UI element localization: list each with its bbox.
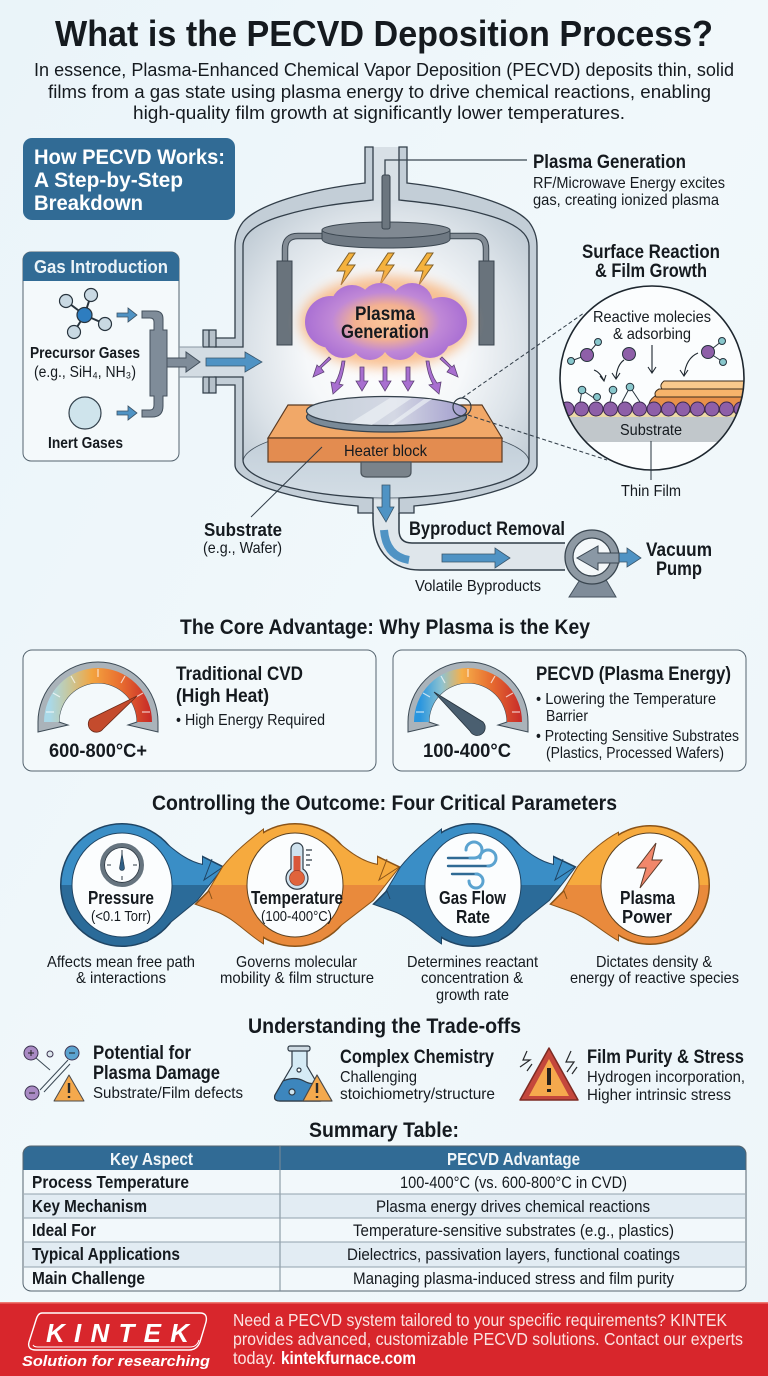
label: vacuum pump: Pump [656, 559, 702, 580]
row: ideal for: Ideal For [32, 1220, 96, 1240]
chamber interior [180, 147, 565, 570]
trade-off: film purity and stress: Film Purity & Stress [587, 1047, 744, 1068]
magnified view: surface reaction: Reactive molecies [593, 309, 711, 326]
icon: ions and warning [24, 1046, 84, 1101]
row: typical applications: Dielectrics, passivation layers, functional coatings [347, 1246, 680, 1264]
row: process temperature [32, 1172, 627, 1192]
description: gas flow rate: growth rate [436, 987, 509, 1004]
label: precursor gases: (e.g., SiH₄, NH₃) [34, 364, 136, 381]
callout: substrate: Substrate [204, 520, 282, 540]
gas-phase molecules [568, 338, 726, 366]
label: gas flow rate: Rate [456, 907, 490, 927]
label: pressure [88, 888, 154, 925]
heading: critical parameters: Controlling the Outcome: Four Critical Parameters [152, 791, 617, 815]
icon: thermometer [286, 843, 312, 889]
row: main challenge [32, 1268, 675, 1288]
label: vacuum pump: Vacuum [646, 540, 712, 561]
intro paragraph: films from a gas state using plasma energy to drive chemical reactions, enabling [48, 81, 711, 102]
node: gas flow rate [374, 824, 575, 946]
description: plasma power [570, 954, 739, 987]
icon: precursor molecule [60, 288, 112, 338]
trade-off: plasma damage: Substrate/Film defects [93, 1085, 243, 1102]
panel: PECVD plasma energy: PECVD (Plasma Energy) [536, 663, 731, 685]
heading: core advantage: The Core Advantage: Why Plasma is the Key [180, 615, 590, 639]
label: volatile byproducts: Volatile Byproducts [415, 578, 541, 595]
section banner: how PECVD works: Breakdown [34, 191, 143, 215]
icon: pressure gauge [102, 845, 142, 885]
label: precursor gases: Precursor Gases [30, 345, 140, 362]
arrow: exhaust down [377, 485, 394, 522]
description: pressure: & interactions [76, 970, 166, 987]
plasma cloud: Plasma [355, 304, 415, 325]
heading: surface reaction: Surface Reaction [582, 241, 720, 263]
gauge: high temperature [38, 662, 158, 732]
panel: traditional CVD: • High Energy Required [176, 712, 325, 729]
arrow: byproduct flow [442, 548, 510, 568]
heading: trade-offs: Understanding the Trade-offs [248, 1014, 521, 1038]
row: key mechanism: Key Mechanism [32, 1196, 147, 1216]
icon: flask and warning [275, 1046, 332, 1101]
adsorbed molecules [578, 383, 640, 402]
label: pressure: (<0.1 Torr) [91, 908, 151, 925]
label: gas flow rate [439, 888, 507, 927]
trade-off: plasma damage: Plasma Damage [93, 1063, 220, 1084]
intro paragraph: high-quality film growth at significantly lower temperatures. [133, 102, 625, 123]
icon: lightning bolts [337, 253, 433, 285]
description: plasma power: energy of reactive species [570, 970, 739, 987]
trade-off: complex chemistry: Complex Chemistry [340, 1047, 494, 1068]
panel: traditional CVD: 600-800°C+ [49, 740, 147, 762]
label: plasma power [620, 888, 676, 927]
table header: PECVD Advantage [447, 1149, 580, 1169]
panel: traditional CVD [23, 650, 376, 771]
gauge: low temperature [408, 662, 528, 736]
call to action: kintekfurnace.com [281, 1348, 416, 1368]
inlet flange [203, 330, 216, 393]
intro paragraph: In essence, Plasma-Enhanced Chemical Vapor Deposition (PECVD) deposits thin, solid [34, 59, 734, 80]
row: main challenge: Main Challenge [32, 1268, 145, 1288]
arrow: gas inlet flow [206, 352, 262, 372]
panel: gas introduction: Gas Introduction [34, 256, 168, 277]
label: temperature: (100-400°C) [261, 908, 332, 925]
heater block: Heater block [344, 443, 428, 460]
adsorption arrows [594, 345, 698, 381]
row: process temperature: Process Temperature [32, 1172, 189, 1192]
magnified view: surface reaction: Thin Film [621, 483, 681, 500]
label: pressure: Pressure [88, 888, 154, 908]
top electrode [277, 175, 494, 345]
trade-off: plasma damage: Potential for [93, 1043, 192, 1064]
node: temperature [196, 824, 399, 946]
panel: PECVD plasma energy: 100-400°C [423, 740, 511, 762]
trade-off: plasma damage [24, 1043, 243, 1102]
node: pressure [61, 824, 223, 946]
panel: PECVD plasma energy: Barrier [546, 708, 589, 725]
description: gas flow rate: concentration & [421, 970, 523, 987]
row: key mechanism: Plasma energy drives chemical reactions [376, 1198, 650, 1216]
table header: Key Aspect [110, 1149, 193, 1169]
description: temperature: mobility & film structure [220, 970, 374, 987]
row: process temperature: 100-400°C (vs. 600-800°C in CVD) [400, 1174, 627, 1192]
magnified view: surface reaction: & adsorbing [613, 326, 691, 343]
call to action: Need a PECVD system tailored to your specific requirements? KINTEK [233, 1310, 727, 1330]
description: pressure: Affects mean free path [47, 954, 195, 971]
diagram: PECVD chamber [142, 147, 641, 597]
row: ideal for: Temperature-sensitive substrates (e.g., plastics) [353, 1222, 674, 1240]
panel: PECVD plasma energy: • Protecting Sensitive Substrates [536, 728, 739, 745]
exhaust pipe [373, 513, 565, 570]
heading: surface reaction: & Film Growth [595, 260, 707, 282]
trade-off: complex chemistry [275, 1046, 495, 1103]
label: gas flow rate: Gas Flow [439, 888, 507, 908]
panel: traditional CVD: (High Heat) [176, 685, 269, 707]
surface atoms [560, 402, 748, 416]
callout: substrate: (e.g., Wafer) [203, 540, 282, 557]
arrows: plasma species flow [313, 357, 458, 394]
callout: plasma generation: RF/Microwave Energy excites [533, 175, 725, 192]
panel: PECVD plasma energy [393, 650, 746, 771]
row: main challenge: Managing plasma-induced stress and film purity [353, 1270, 675, 1288]
wafer [306, 396, 466, 432]
heading: summary table: Summary Table: [309, 1119, 459, 1142]
table header [110, 1149, 580, 1169]
icon: warning triangle [520, 1048, 578, 1100]
trade-off: film purity and stress: Hydrogen incorporation, [587, 1069, 745, 1086]
manifold [142, 311, 200, 417]
plasma cloud [300, 276, 472, 368]
node: plasma power [551, 826, 709, 944]
magnified view: surface reaction: Substrate [620, 422, 682, 439]
panel: PECVD plasma energy: • Lowering the Temperature [536, 691, 716, 708]
magnified view: surface reaction [453, 286, 760, 500]
heading: surface reaction [582, 241, 720, 282]
flow diagram: four parameters [61, 824, 709, 946]
description: gas flow rate [407, 954, 539, 1004]
section banner: how PECVD works [23, 138, 235, 220]
chamber wall: left lower [215, 377, 373, 513]
callout: plasma generation [385, 151, 725, 209]
row: ideal for [32, 1220, 674, 1240]
label: byproduct removal: Byproduct Removal [409, 519, 565, 540]
callout: substrate [203, 447, 322, 557]
label: plasma power: Plasma [620, 888, 676, 908]
description: gas flow rate: Determines reactant [407, 954, 539, 971]
chamber wall: right [399, 147, 537, 513]
label: inert gases: Inert Gases [48, 435, 123, 452]
title: What is the PECVD Deposition Process? [55, 13, 713, 54]
label: plasma power: Power [622, 907, 672, 927]
arrows into manifold [117, 308, 137, 420]
heater block [268, 405, 502, 477]
icon: inert gas sphere [69, 397, 101, 429]
trade-off: complex chemistry: stoichiometry/structure [340, 1086, 495, 1103]
logo: KINTEK [22, 1313, 210, 1370]
trade-off: film purity and stress: Higher intrinsic stress [587, 1087, 731, 1104]
panel: gas introduction [23, 252, 179, 461]
summary table [23, 1146, 746, 1291]
footer banner [0, 1302, 768, 1376]
label: temperature [251, 888, 343, 925]
row: typical applications [32, 1244, 680, 1264]
plasma cloud: Generation [341, 322, 429, 343]
description: temperature: Governs molecular [236, 954, 358, 971]
film layers [649, 381, 750, 412]
call to action [233, 1310, 743, 1368]
section banner: how PECVD works: How PECVD Works: [34, 145, 225, 169]
intro paragraph [34, 59, 734, 123]
chamber wall: left upper [215, 147, 373, 347]
section banner: how PECVD works: A Step-by-Step [34, 168, 183, 192]
description: pressure [47, 954, 195, 987]
arrow: exhaust bend [384, 530, 409, 560]
row: key mechanism [32, 1196, 650, 1216]
label: precursor gases [30, 345, 140, 381]
description: temperature [220, 954, 374, 987]
panel: traditional CVD: Traditional CVD [176, 663, 303, 685]
vacuum pump [565, 530, 641, 597]
row: typical applications: Typical Applications [32, 1244, 180, 1264]
label: vacuum pump [646, 540, 712, 580]
icon: gas flow wind [448, 842, 496, 888]
trade-off: complex chemistry: Challenging [340, 1069, 417, 1086]
callout: plasma generation: Plasma Generation [533, 151, 686, 173]
logo: KINTEK: Solution for researching [22, 1354, 210, 1370]
logo: KINTEK: KINTEK [46, 1318, 191, 1348]
trade-off: film purity and stress [520, 1047, 745, 1104]
call to action: today. [233, 1348, 276, 1368]
label: temperature: Temperature [251, 888, 343, 908]
callout: plasma generation: gas, creating ionized plasma [533, 192, 719, 209]
description: plasma power: Dictates density & [596, 954, 712, 971]
panel: PECVD plasma energy: (Plastics, Processed Wafers) [546, 745, 724, 762]
icon: plasma bolt [637, 843, 662, 888]
